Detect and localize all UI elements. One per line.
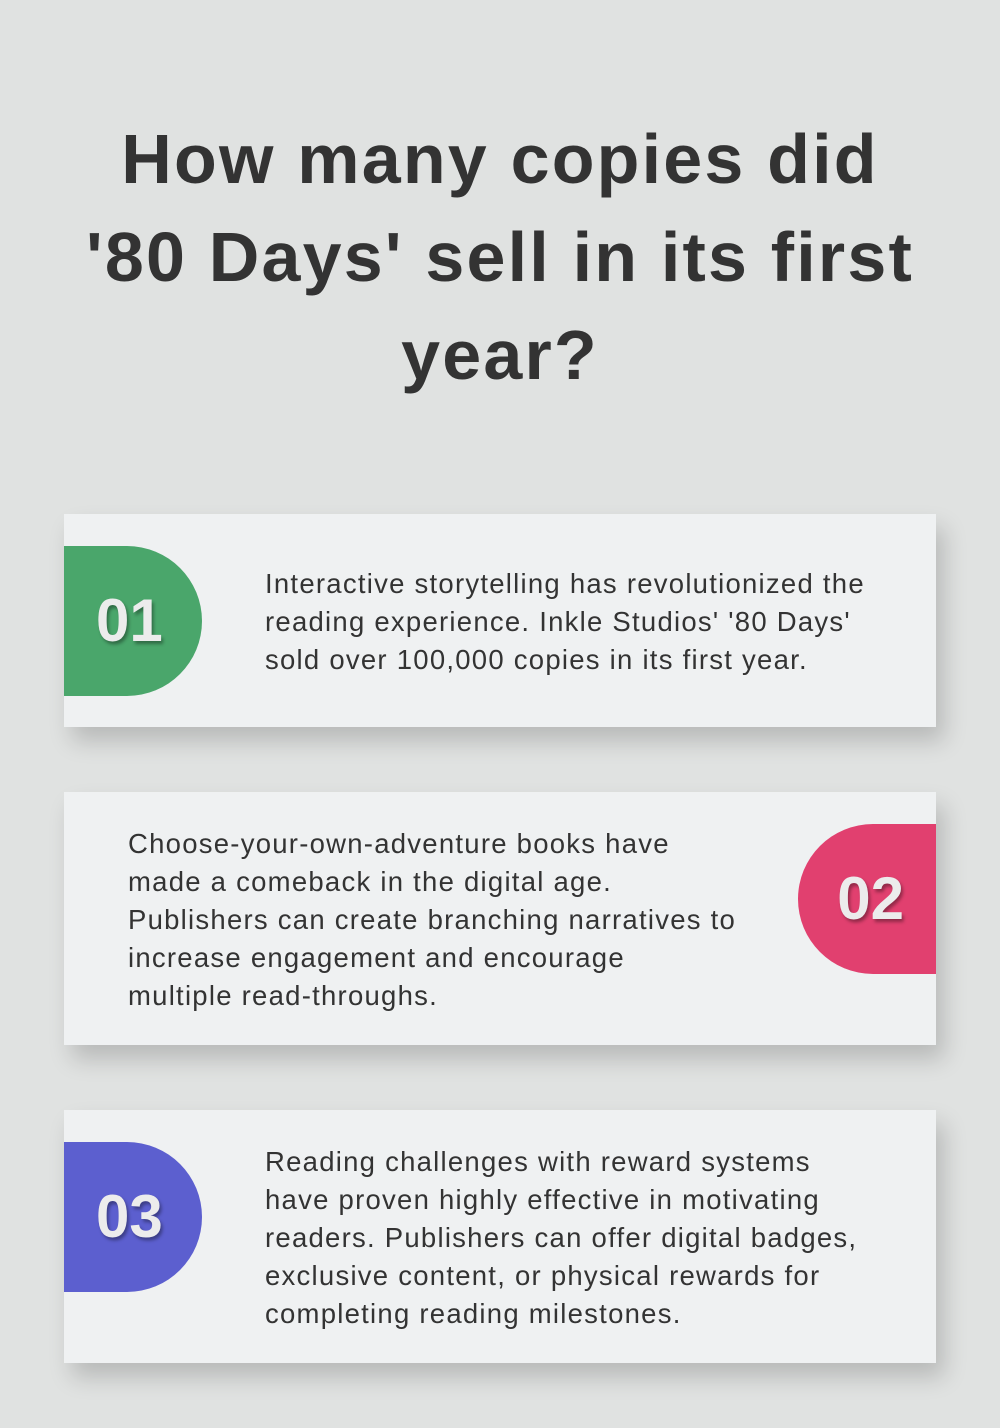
title: year?	[401, 316, 599, 394]
text 1: sold over 100,000 copies in its first year.	[265, 644, 808, 675]
title: How many copies did	[121, 120, 879, 198]
text 3: exclusive content, or physical rewards for	[265, 1260, 820, 1291]
text 3: have proven highly effective in motivating	[265, 1184, 820, 1215]
text 3: readers. Publishers can offer digital badges,	[265, 1222, 857, 1253]
text 2	[128, 828, 736, 1011]
badge 03: 03	[96, 1183, 163, 1250]
text 2: Publishers can create branching narratives to	[128, 904, 736, 935]
text 1: Interactive storytelling has revolutionized the	[265, 568, 865, 599]
text 1	[265, 568, 865, 675]
text 3	[265, 1146, 857, 1329]
badge 02: 02	[837, 865, 904, 932]
badge 02	[798, 824, 936, 974]
panel: card 3	[64, 1110, 936, 1363]
text 2: Choose-your-own-adventure books have	[128, 828, 670, 859]
text 2: multiple read-throughs.	[128, 980, 438, 1011]
text 2: increase engagement and encourage	[128, 942, 625, 973]
panel: card 1	[64, 514, 936, 727]
title	[86, 120, 914, 394]
badge 01	[64, 546, 202, 696]
title: '80 Days' sell in its first	[86, 218, 914, 296]
text 3: completing reading milestones.	[265, 1298, 682, 1329]
text 1: reading experience. Inkle Studios' '80 Days'	[265, 606, 851, 637]
text 2: made a comeback in the digital age.	[128, 866, 612, 897]
badge 01: 01	[96, 587, 163, 654]
text 3: Reading challenges with reward systems	[265, 1146, 811, 1177]
badge 03	[64, 1142, 202, 1292]
panel: card 2	[64, 792, 936, 1045]
